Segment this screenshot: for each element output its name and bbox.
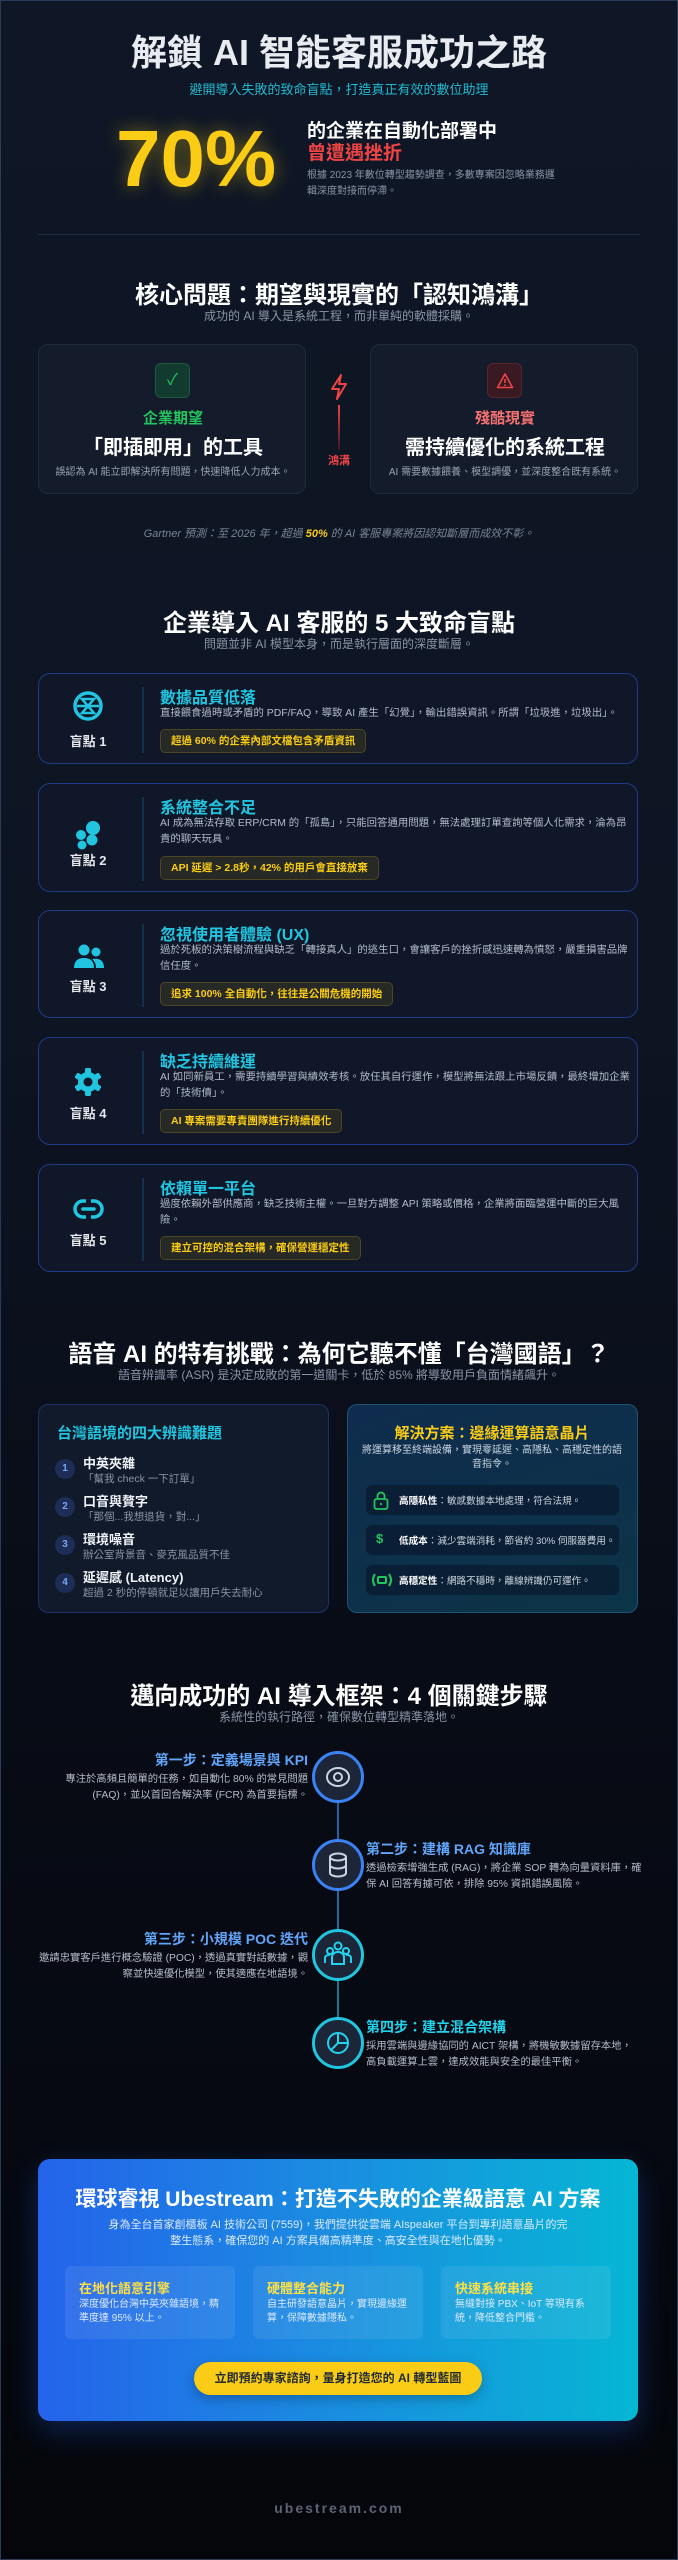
- title: 缺乏持續維運: [160, 1054, 256, 1071]
- item 3: [55, 1532, 230, 1561]
- step 2: [312, 1839, 642, 1891]
- label: 盲點 4: [70, 1106, 106, 1121]
- tag: [160, 729, 366, 753]
- stat text: 的企業在自動化部署中: [307, 121, 497, 142]
- icon: lightning: [330, 374, 347, 400]
- card: blind spot 3: [38, 910, 638, 1018]
- step 2: 第二步：建構 RAG 知識庫: [366, 1841, 531, 1857]
- step 1: 第一步：定義場景與 KPI: [155, 1752, 308, 1768]
- feature: integration: 快速系統串接: [455, 2281, 533, 2296]
- item 1: 1: [62, 1463, 68, 1474]
- main text: 需持續優化的系統工程: [405, 437, 605, 459]
- label: 企業期望: [143, 410, 203, 427]
- item 2: 口音與贅字: [83, 1494, 148, 1509]
- CTA title: 環球睿視 Ubestream：打造不失敗的企業級語意 AI 方案: [75, 2188, 601, 2211]
- timeline: [39, 1751, 642, 2069]
- step 1: [65, 1751, 364, 1803]
- item 1: 中英夾雜: [83, 1456, 135, 1471]
- label: 盲點 1: [70, 734, 106, 749]
- heading: 解決方案：邊緣運算語意晶片: [394, 1425, 590, 1442]
- tag: 超過 60% 的企業內部文檔包含矛盾資訊: [171, 735, 355, 747]
- panel: expectation: [38, 344, 306, 494]
- footer: ubestream.com: [274, 2500, 404, 2516]
- icon: warning: [487, 363, 522, 398]
- desc: 過度依賴外部供應商，缺乏技術主權。一旦對方調整 API 策略或價格，企業將面臨營運中斷的巨大風險。: [160, 1199, 619, 1226]
- main text: 「即插即用」的工具: [83, 437, 263, 459]
- item 4: 4: [62, 1577, 68, 1588]
- stat: 70%: [112, 114, 555, 203]
- heading: voice AI: 語音 AI 的特有挑戰：為何它聽不懂「台灣國語」？: [68, 1341, 610, 1368]
- item 1: [55, 1456, 200, 1485]
- item 2: 2: [62, 1501, 68, 1512]
- title: 依賴單一平台: [160, 1181, 256, 1198]
- subheading: 問題並非 AI 模型本身，而是執行層面的深度斷層。: [204, 637, 474, 651]
- panel: solution: [347, 1404, 638, 1613]
- CTA desc: 身為全台首家創櫃板 AI 技術公司 (7559)，我們提供從雲端 AIspeaker 平台到專利語意晶片的完整生態系，確保您的 AI 方案具備高精準度、高安全性與在地化優勢。: [108, 2219, 568, 2247]
- step 1: 專注於高頻且簡單的任務，如自動化 80% 的常見問題 (FAQ)，並以首回合解決率 (FCR) 為首要指標。: [65, 1774, 308, 1801]
- panel: reality: [370, 344, 638, 494]
- stat text: 曾遭遇挫折: [307, 143, 402, 164]
- icon: users: [74, 944, 104, 968]
- item 4: 延遲感 (Latency): [83, 1570, 183, 1585]
- CTA panel: Ubestream: [38, 2159, 638, 2421]
- item 3: 辦公室背景音、麥克風品質不佳: [83, 1549, 230, 1561]
- icon: link: [73, 1199, 104, 1219]
- heading: framework: 邁向成功的 AI 導入框架：4 個關鍵步驟: [130, 1683, 548, 1710]
- step 4: 第四步：建立混合架構: [366, 2019, 506, 2035]
- row: low cost: [366, 1525, 619, 1555]
- feature: hardware: [253, 2266, 423, 2339]
- tag: API 延遲 > 2.8秒，42% 的用戶會直接放棄: [171, 862, 368, 874]
- stat text: [307, 120, 555, 197]
- step 4: 採用雲端與邊緣協同的 AICT 架構，將機敏數據留存本地，高負載運算上雲，達成效能與安全的最佳平衡。: [366, 2041, 632, 2068]
- card: blind spot 4: [38, 1037, 638, 1145]
- tag: [160, 856, 379, 880]
- title: 系統整合不足: [160, 800, 256, 817]
- step 3: [39, 1929, 364, 1981]
- row: stability: 高穩定性：網路不穩時，離線辨識仍可運作。: [399, 1576, 591, 1587]
- CTA button: 立即預約專家諮詢，量身打造您的 AI 轉型藍圖: [215, 2371, 461, 2385]
- label: 殘酷現實: [475, 410, 535, 427]
- step 3: 第三步：小規模 POC 迭代: [144, 1931, 308, 1947]
- desc: AI 如同新員工，需要持續學習與績效考核。放任其自行運作，模型將無法跟上市場反饋，最終增加企業的「技術債」。: [160, 1072, 630, 1099]
- item 3: 3: [62, 1539, 68, 1550]
- item 4: [55, 1570, 263, 1599]
- row: low cost: 低成本：減少雲端消耗，節省約 30% 伺服器費用。: [399, 1536, 615, 1547]
- subheading: 語音辨識率 (ASR) 是決定成敗的第一道關卡，低於 85% 將導致用戶負面情緒飆升。: [118, 1368, 560, 1382]
- card: blind spot 1: [38, 673, 638, 764]
- panel: four challenges: [38, 1404, 329, 1613]
- item 3: 環境噪音: [83, 1532, 135, 1547]
- title: 忽視使用者體驗 (UX): [160, 927, 309, 944]
- card: blind spot 2: [38, 783, 638, 892]
- icon: check: ✓: [167, 372, 178, 389]
- feature: localization: [65, 2266, 235, 2339]
- label: 鴻溝: [328, 455, 350, 467]
- desc: 過於死板的決策樹流程與缺乏「轉接真人」的逃生口，會讓客戶的挫折感迅速轉為憤怒，嚴重損害品牌信任度。: [160, 945, 628, 972]
- icon: gear: [74, 1068, 102, 1096]
- item 4: 超過 2 秒的停頓就足以讓用戶失去耐心: [83, 1587, 263, 1599]
- step 2: 透過檢索增強生成 (RAG)，將企業 SOP 轉為向量資料庫，確保 AI 回答有據可依，排除 95% 資訊錯誤風險。: [366, 1863, 642, 1890]
- feature: localization: 在地化語意引擎: [79, 2281, 170, 2296]
- stat text: 根據 2023 年數位轉型趨勢調查，多數專案因忽略業務邏輯深度對接而停滯。: [307, 170, 555, 197]
- icon: data: [73, 691, 103, 721]
- title: 解鎖 AI 智能客服成功之路: [131, 32, 547, 73]
- tag: 建立可控的混合架構，確保營運穩定性: [171, 1242, 350, 1254]
- step 4: [312, 2017, 632, 2069]
- note: Gartner: Gartner 預測：至 2026 年，超過 50% 的 AI 客服專案將因認知斷層而成效不彰。: [144, 528, 534, 540]
- feature: hardware: 自主研發語意晶片，實現邊緣運算，保障數據隱私。: [267, 2299, 407, 2324]
- tag: [160, 982, 393, 1006]
- feature: localization: 深度優化台灣中英夾雜語境，精準度達 95% 以上。: [79, 2299, 219, 2324]
- icon: blobs: [76, 821, 100, 850]
- heading: core problem: 核心問題：期望與現實的「認知鴻溝」: [135, 282, 543, 309]
- subheading: 系統性的執行路徑，確保數位轉型精準落地。: [219, 1710, 459, 1724]
- icon: lock: [374, 1492, 388, 1510]
- icon: dollar: $: [376, 1531, 383, 1546]
- title: 數據品質低落: [160, 690, 256, 707]
- desc: 誤認為 AI 能立即解決所有問題，快速降低人力成本。: [55, 467, 290, 478]
- icon: signal: [372, 1574, 392, 1586]
- gap indicator: [328, 374, 350, 467]
- item 2: [55, 1494, 206, 1523]
- tag: 追求 100% 全自動化，往往是公關危機的開始: [171, 988, 382, 1000]
- row: privacy: [366, 1485, 619, 1515]
- desc: AI 成為無法存取 ERP/CRM 的「孤島」，只能回答通用問題，無法處理訂單查詢等個人化需求，淪為昂貴的聊天玩具。: [160, 818, 626, 845]
- desc: 將運算移至終端設備，實現零延遲、高隱私、高穩定性的語音指令。: [362, 1445, 622, 1470]
- icon: check: [155, 363, 190, 398]
- subheading: 成功的 AI 導入是系統工程，而非單純的軟體採購。: [204, 309, 474, 323]
- feature: hardware: 硬體整合能力: [267, 2281, 345, 2296]
- subtitle: 避開導入失敗的致命盲點，打造真正有效的數位助理: [189, 82, 488, 97]
- feature: integration: 無縫對接 PBX、IoT 等現有系統，降低整合門檻。: [455, 2299, 585, 2324]
- CTA button: [194, 2362, 482, 2395]
- card: blind spot 5: [38, 1164, 638, 1272]
- item 1: 「幫我 check 一下訂單」: [83, 1473, 200, 1485]
- tag: [160, 1236, 360, 1260]
- label: 盲點 5: [70, 1233, 106, 1248]
- tag: [160, 1109, 342, 1133]
- step 3: 邀請忠實客戶進行概念驗證 (POC)，透過真實對話數據，觀察並快速優化模型，使其適應在地語境。: [39, 1953, 308, 1980]
- desc: 直接餵食過時或矛盾的 PDF/FAQ，導致 AI 產生「幻覺」，輸出錯誤資訊。所謂「垃圾進，垃圾出」。: [160, 708, 618, 719]
- big number: 70%: [116, 114, 276, 203]
- heading: 5 blind spots: 企業導入 AI 客服的 5 大致命盲點: [163, 610, 515, 637]
- heading: 台灣語境的四大辨識難題: [57, 1425, 222, 1442]
- label: 盲點 3: [70, 979, 106, 994]
- desc: AI 需要數據餵養、模型調優，並深度整合既有系統。: [389, 467, 621, 478]
- feature: integration: [441, 2266, 611, 2339]
- row: privacy: 高隱私性：敏感數據本地處理，符合法規。: [399, 1496, 581, 1507]
- item 2: 「那個...我想退貨，對...」: [83, 1511, 206, 1523]
- row: stability: [366, 1565, 619, 1595]
- label: 盲點 2: [70, 853, 106, 868]
- tag: AI 專案需要專責團隊進行持續優化: [171, 1115, 331, 1127]
